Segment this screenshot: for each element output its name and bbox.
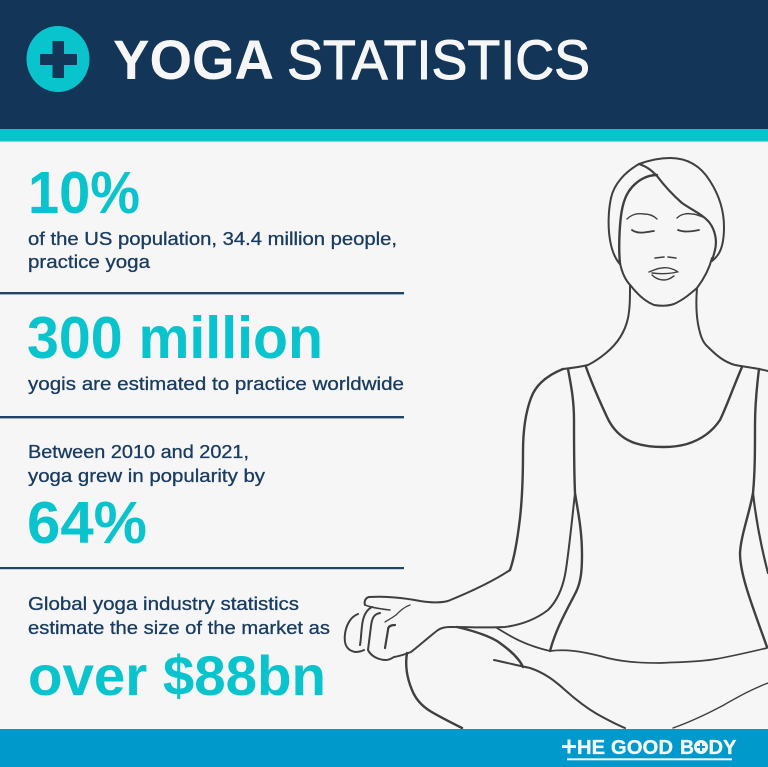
logo: The Good Body: DY [708,737,737,759]
illustration: meditating woman [345,158,768,728]
stat: 10%: 10% [28,160,140,226]
icon: plus in circle [26,26,90,92]
stat: over $88bn [28,593,330,707]
head and hair [609,158,724,306]
stat: 10%: practice yoga [28,251,151,272]
header band [0,0,768,142]
neck and shoulders [563,286,768,371]
stat: 300 million: yogis are estimated to practice worldwide [28,373,404,394]
stat: 64%: Between 2010 and 2021, [28,441,249,462]
stat: over $88bn: Global yoga industry statistics [28,593,299,614]
crossed legs [406,627,768,728]
stat: over $88bn: estimate the size of the market as [28,617,330,638]
footer band [0,729,768,767]
title: YOGA [113,28,274,91]
stat: over $88bn: over $88bn [28,644,326,707]
stat: 300 million [27,305,404,394]
stat: 300 million: 300 million [27,305,323,371]
title: STATISTICS [287,28,590,91]
left arm and hand [345,369,575,660]
face details [627,214,703,280]
stat: 64%: yoga grew in popularity by [28,465,266,486]
logo: The Good Body [562,737,737,760]
stat: 10% [28,160,397,272]
logo: The Good Body: HE GOOD [577,737,673,759]
logo: The Good Body: B [680,737,694,759]
stat: 10%: of the US population, 34.4 million people, [28,228,397,249]
title [113,28,590,91]
stat: 64% [27,441,266,556]
tank top [497,367,768,663]
stat: 64%: 64% [27,490,147,556]
